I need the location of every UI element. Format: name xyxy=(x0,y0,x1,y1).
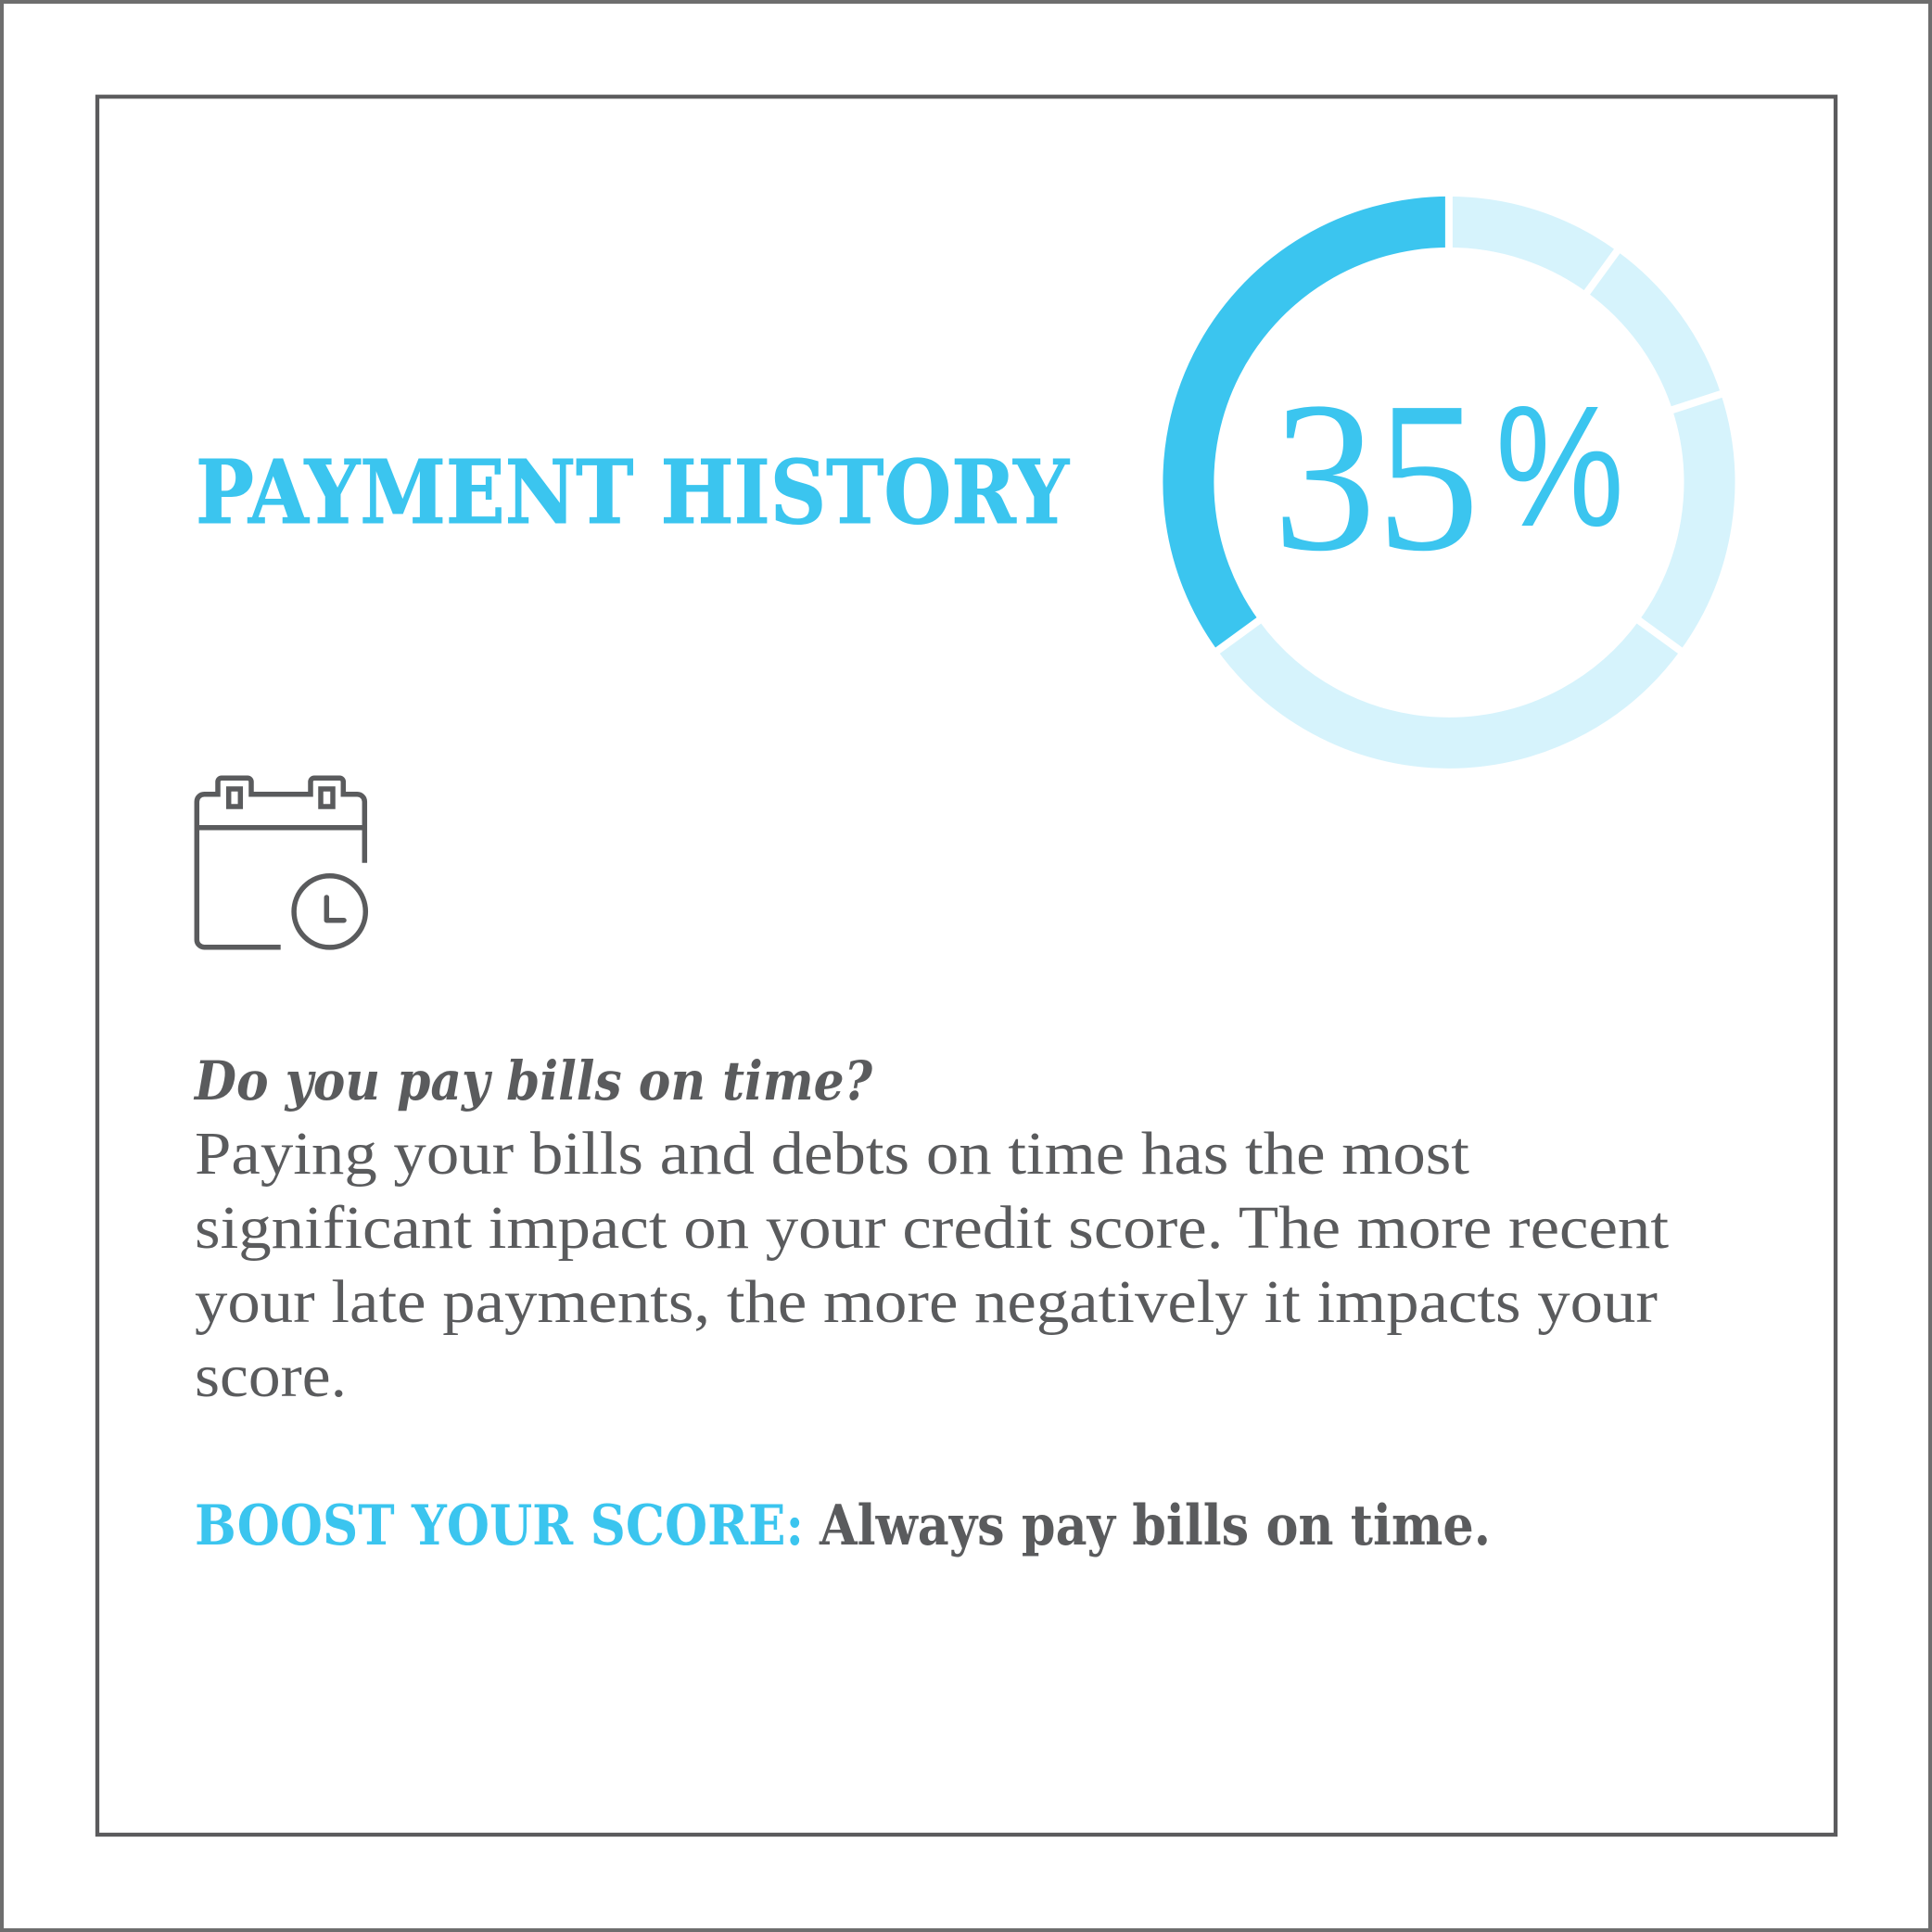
donut chart xyxy=(1188,190,1726,743)
percentage value xyxy=(1273,358,1624,596)
text block: question: Do you pay bills on time? xyxy=(193,1049,873,1112)
title: PAYMENT HISTORY xyxy=(196,441,1070,544)
segment: light 3 xyxy=(1659,402,1710,636)
percentage value: 35 xyxy=(1273,358,1480,596)
text block: explanation xyxy=(195,1120,1669,1410)
text block: explanation: your late payments, the more negatively it impacts your xyxy=(195,1268,1658,1336)
icon: calendar with clock xyxy=(197,778,365,947)
text block: explanation: significant impact on your credit score. The more recent xyxy=(195,1194,1669,1262)
text block: explanation: Paying your bills and debts on time has the most xyxy=(195,1120,1469,1188)
callout: boost your score: Always pay bills on time. xyxy=(819,1493,1491,1558)
segment: 35% highlighted xyxy=(1188,222,1449,636)
callout: boost your score: BOOST YOUR SCORE: xyxy=(195,1493,804,1558)
segment: light 2 xyxy=(1602,272,1697,402)
segment: light 1 xyxy=(1449,222,1602,272)
percentage value: % xyxy=(1495,371,1624,563)
callout: boost your score xyxy=(195,1493,1491,1558)
text block: explanation: score. xyxy=(195,1342,347,1410)
segment: light 4 xyxy=(1239,636,1659,743)
